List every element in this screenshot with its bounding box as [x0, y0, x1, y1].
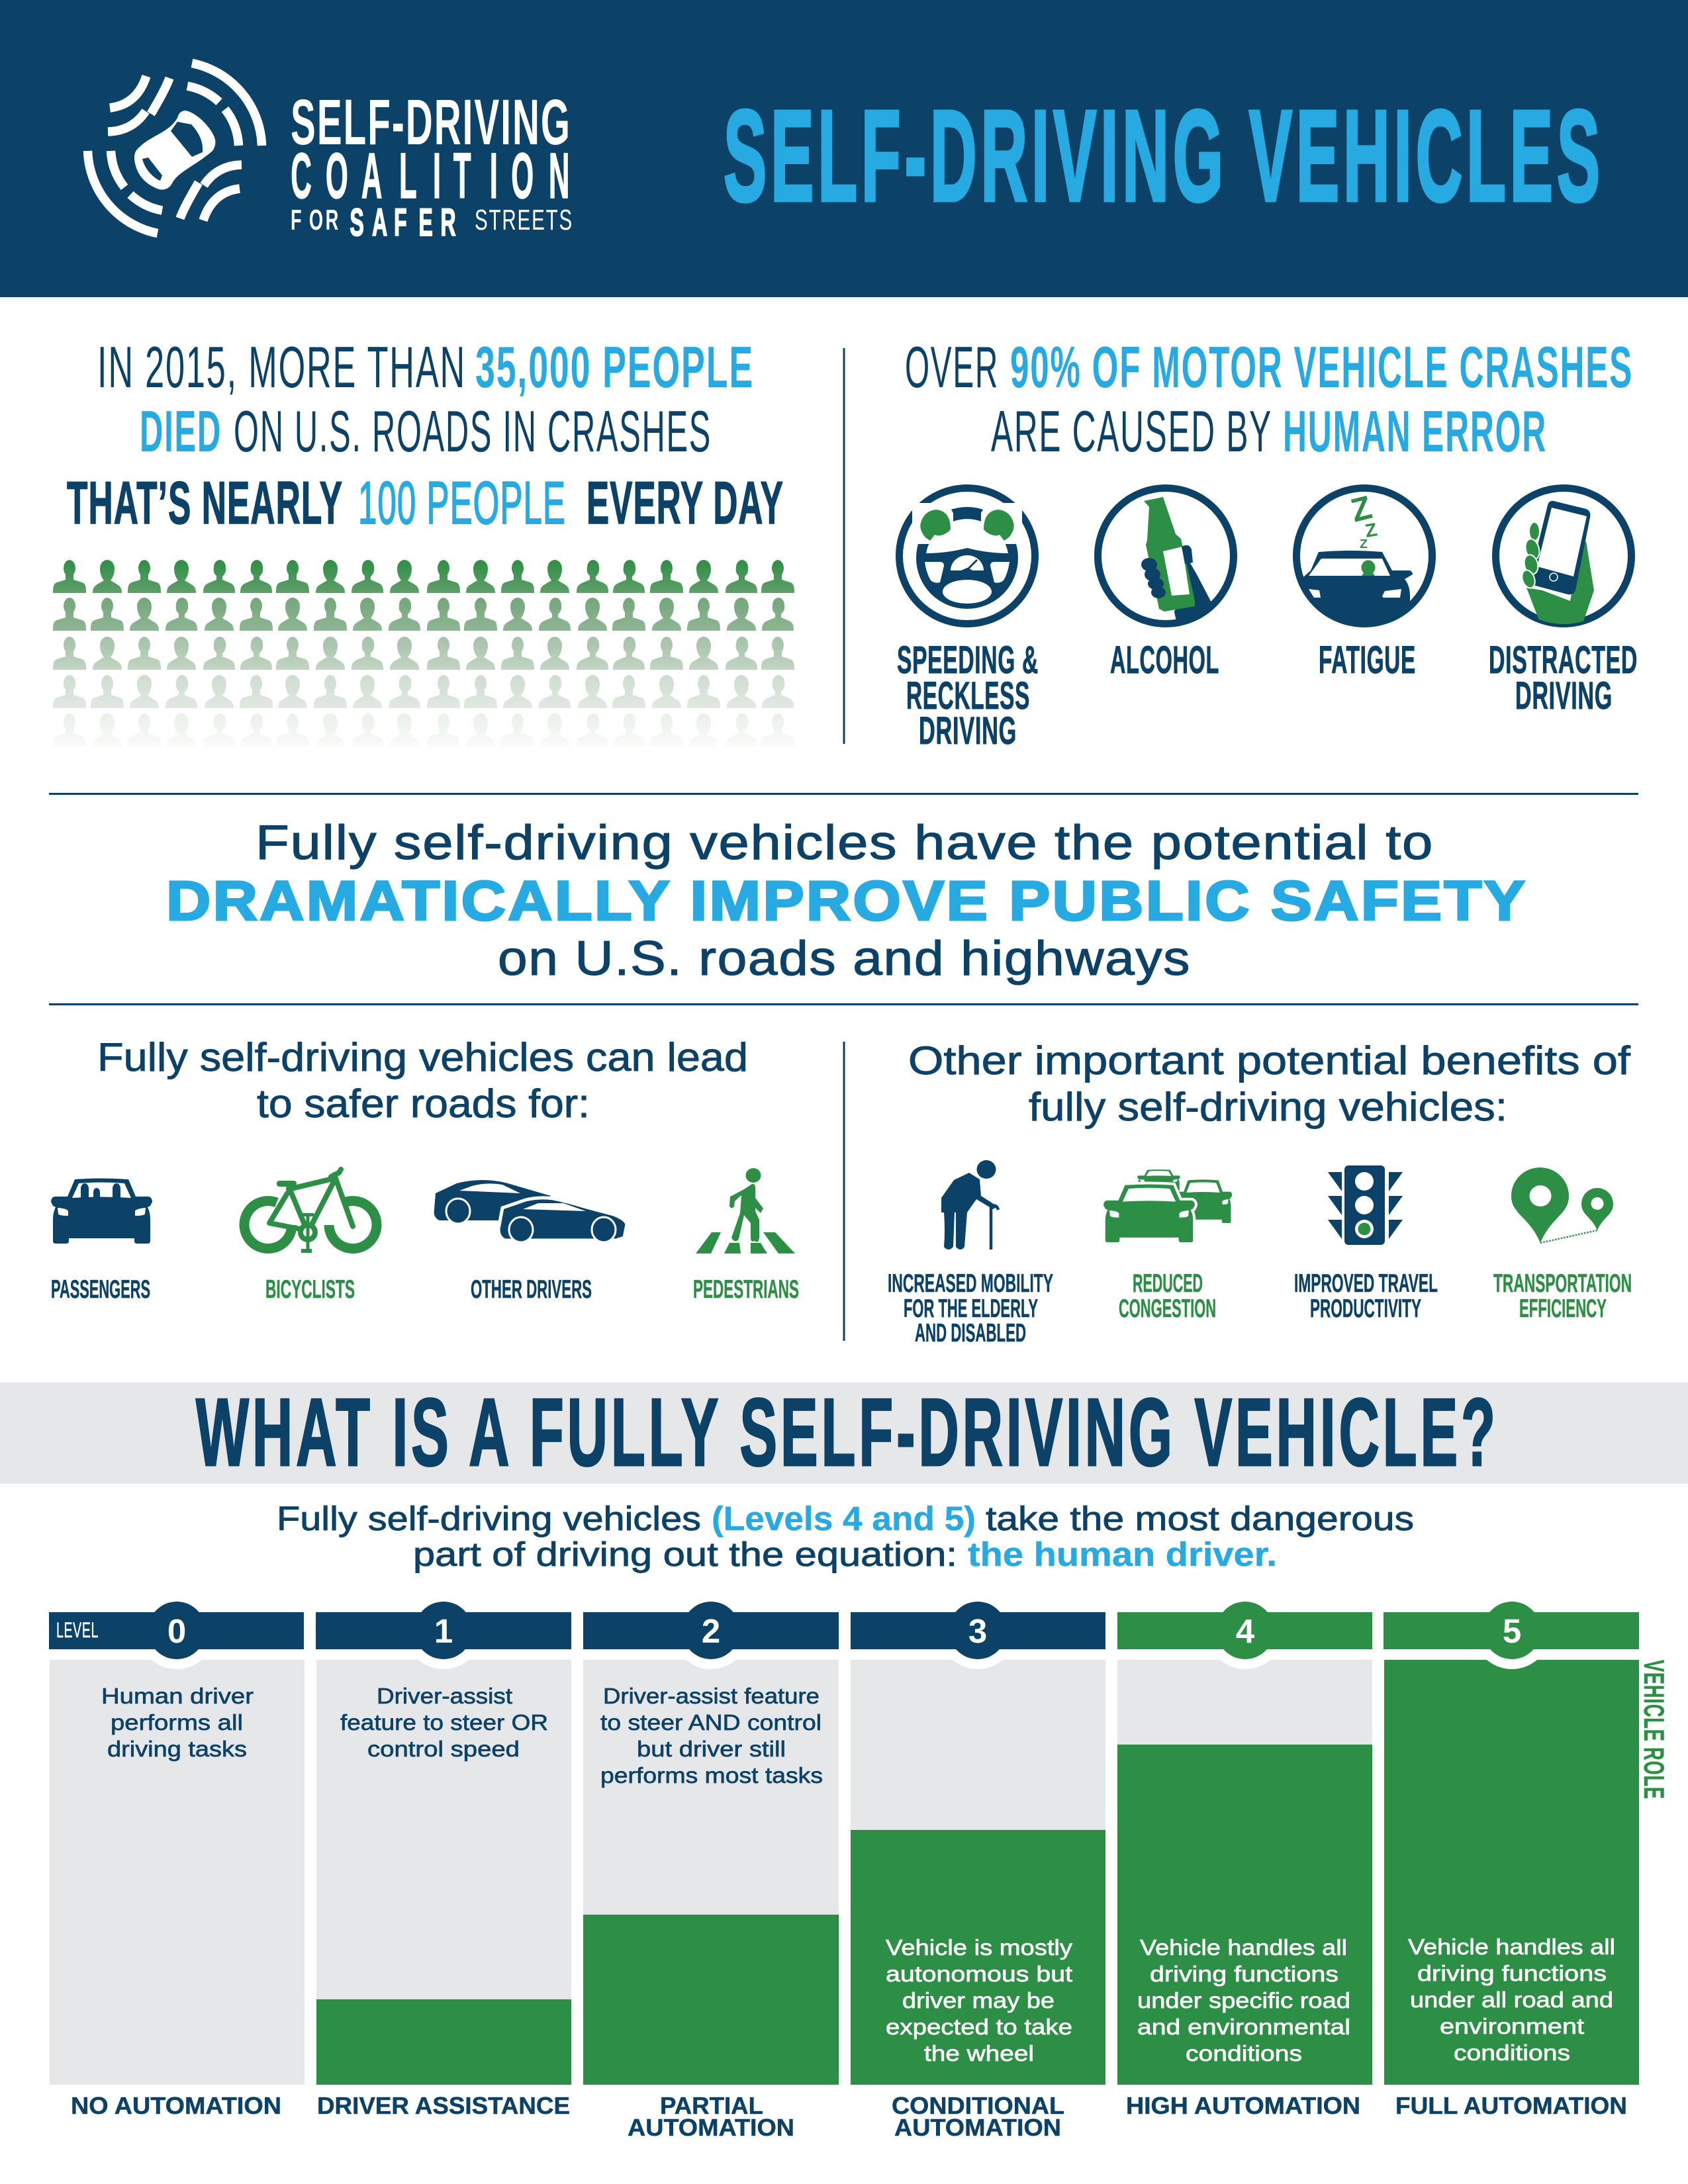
column: level 1: 1: [434, 1612, 453, 1650]
column: level 3: Vehicle is mostly: [886, 1935, 1073, 1960]
heading: over 90% human error: ARE CAUSED BY: [991, 398, 1272, 464]
label: passengers: PASSENGERS: [51, 1275, 150, 1304]
column: level 0: Human driver: [101, 1684, 254, 1708]
column: level 5: environment: [1440, 2014, 1584, 2038]
heading: 35,000 people died: DIED: [140, 398, 222, 464]
column: level 1: [316, 1591, 571, 2119]
column: level 0: 0: [167, 1612, 186, 1650]
heading: 35,000 people died: [97, 334, 754, 464]
panel: human error causes: [897, 334, 1638, 752]
intro text: Fully self-driving vehicles: [277, 1500, 701, 1537]
item: pedestrians: [693, 1168, 799, 1304]
column: level 2: Driver-assist feature: [603, 1684, 820, 1708]
label: speeding: DRIVING: [919, 709, 1017, 752]
column: level 4: under specific road: [1137, 1988, 1350, 2013]
icon: hand holding phone: [1496, 488, 1631, 625]
label: speeding: RECKLESS: [906, 674, 1030, 717]
label: alcohol: ALCOHOL: [1110, 639, 1219, 682]
chart: automation levels: [49, 1591, 1669, 2141]
subheading: nearly 100 people every day: EVERY DAY: [586, 470, 784, 537]
logo icon: car with sensor arcs: [87, 64, 262, 233]
column: level 2: but driver still: [637, 1737, 786, 1761]
callout: dramatically improve public safety: on U.S. roads and highways: [498, 932, 1191, 985]
column: level 5: driving functions: [1417, 1961, 1607, 1985]
cause: speeding and reckless driving: [897, 488, 1039, 752]
icon: sleeping driver in car: Z: [1347, 488, 1376, 529]
heading: over 90% human error: [905, 334, 1633, 464]
callout: dramatically improve public safety: DRAMATICALLY IMPROVE PUBLIC SAFETY: [166, 870, 1527, 932]
column: level 3: the wheel: [924, 2041, 1034, 2066]
column: level 5: Vehicle handles all: [1408, 1934, 1615, 1959]
icon: traffic light: [1328, 1165, 1403, 1245]
icon: elderly person with cane: [941, 1160, 998, 1250]
label: distracted driving: [1489, 639, 1638, 717]
subheading: nearly 100 people every day: THAT’S NEARLY: [67, 470, 343, 537]
heading: 35,000 people died: IN 2015, MORE THAN: [97, 334, 466, 400]
column: level 2: PARTIAL: [660, 2092, 763, 2119]
heading: safer roads for: [97, 1035, 748, 1126]
column: level 3: 3: [968, 1612, 987, 1650]
column: level 4: conditions: [1186, 2041, 1302, 2066]
axis label: vehicle role: VEHICLE ROLE: [1638, 1660, 1669, 1799]
heading: safer roads for: Fully self-driving vehicles can lead: [97, 1035, 748, 1079]
heading: 35,000 people died: ON U.S. ROADS IN CRASHES: [234, 398, 712, 464]
column: level 2: 2: [702, 1612, 720, 1650]
panel: crash deaths: [53, 334, 794, 747]
item: other drivers: [434, 1180, 627, 1304]
item: bicyclists: [244, 1169, 377, 1304]
icon: car with passengers: [51, 1178, 152, 1244]
column: level 0: driving tasks: [107, 1737, 247, 1761]
column: level 4: 4: [1236, 1612, 1255, 1650]
panel: other benefits: [888, 1038, 1632, 1347]
column: level 0: LEVEL: [56, 1618, 99, 1642]
item: improved travel productivity: [1294, 1165, 1438, 1323]
label: transportation efficiency: EFFICIENCY: [1519, 1295, 1607, 1323]
icon: congested cars: [1103, 1169, 1232, 1242]
callout: dramatically improve public safety: [166, 816, 1527, 985]
label: reduced congestion: [1119, 1269, 1216, 1323]
column: level 0: [49, 1591, 305, 2119]
cause: fatigue: [1296, 488, 1432, 682]
heading: safer roads for: to safer roads for:: [257, 1081, 590, 1126]
column: level 3: driver may be: [902, 1988, 1055, 2013]
column: level 4: driving functions: [1150, 1962, 1338, 1986]
label: transportation efficiency: [1493, 1269, 1632, 1323]
label: speeding: SPEEDING &: [897, 639, 1039, 682]
logo wordmark: COALITION: [291, 140, 569, 212]
label: increased mobility: FOR THE ELDERLY: [904, 1295, 1038, 1323]
subheading: nearly 100 people every day: [67, 470, 784, 537]
column: level 2: to steer AND control: [600, 1710, 821, 1735]
logo wordmark: STREETS: [475, 204, 573, 236]
label: improved travel productivity: [1294, 1269, 1438, 1323]
column: level 1: DRIVER ASSISTANCE: [317, 2092, 570, 2119]
panel: safer roads: [51, 1035, 799, 1304]
icon: bicycle: [244, 1169, 377, 1253]
icon: steering wheel: [899, 488, 1035, 623]
intro text: take the most dangerous: [986, 1500, 1414, 1537]
label: speeding: [897, 639, 1039, 752]
icon: sleeping driver in car: Z: [1364, 519, 1379, 541]
callout: dramatically improve public safety: Fully self-driving vehicles have the potential to: [256, 816, 1434, 870]
label: reduced congestion: REDUCED: [1133, 1269, 1203, 1298]
column: level 5: [1383, 1591, 1639, 2119]
column: level 3: AUTOMATION: [894, 2114, 1061, 2141]
item: increased mobility: [888, 1160, 1053, 1347]
label: increased mobility: [888, 1269, 1053, 1347]
column: level 4: Vehicle handles all: [1140, 1935, 1347, 1960]
heading: 35,000 people died: 35,000 PEOPLE: [475, 334, 754, 400]
pictogram: rows of people: [53, 560, 794, 747]
column: level 3: autonomous but: [886, 1962, 1072, 1986]
item: passengers: [51, 1178, 152, 1304]
logo: self-driving coalition: [87, 64, 573, 244]
icon: bottle in hand: [1098, 488, 1234, 635]
column: level 1: Driver-assist: [377, 1684, 512, 1708]
logo wordmark: SAFER: [350, 201, 456, 244]
logo wordmark: FOR: [291, 203, 338, 236]
label: fatigue: FATIGUE: [1319, 639, 1416, 682]
label: improved travel productivity: PRODUCTIVITY: [1310, 1295, 1421, 1323]
cause: alcohol: [1098, 488, 1234, 682]
column: level 0: NO AUTOMATION: [71, 2092, 281, 2119]
label: increased mobility: INCREASED MOBILITY: [888, 1269, 1053, 1298]
label: reduced congestion: CONGESTION: [1119, 1295, 1216, 1323]
label: improved travel productivity: IMPROVED TRAVEL: [1294, 1269, 1438, 1298]
column: level 2: AUTOMATION: [628, 2114, 794, 2141]
subheading: nearly 100 people every day: 100 PEOPLE: [358, 470, 566, 537]
label: increased mobility: AND DISABLED: [915, 1319, 1026, 1347]
heading: other benefits: Other important potential benefits of: [908, 1038, 1630, 1083]
intro text: the human driver.: [968, 1535, 1277, 1573]
intro text: [277, 1500, 1414, 1573]
column: level 3: CONDITIONAL: [892, 2092, 1064, 2119]
column: level 0: performs all: [111, 1710, 243, 1735]
column: level 3: expected to take: [886, 2015, 1072, 2039]
column: level 4: and environmental: [1137, 2015, 1350, 2039]
column: level 5: conditions: [1454, 2040, 1570, 2065]
icon: sleeping driver in car: [1296, 488, 1432, 635]
column: level 1: feature to steer OR: [340, 1710, 548, 1735]
label: distracted driving: DRIVING: [1515, 674, 1613, 717]
column: level 1: control speed: [367, 1737, 520, 1761]
column: level 5: 5: [1503, 1612, 1521, 1650]
label: other drivers: OTHER DRIVERS: [471, 1275, 592, 1304]
icon: sleeping driver in car: Z: [1360, 537, 1368, 551]
label: bicyclists: BICYCLISTS: [265, 1275, 355, 1304]
header banner: [0, 0, 1688, 297]
label: pedestrians: PEDESTRIANS: [693, 1275, 799, 1304]
column: level 5: under all road and: [1410, 1987, 1613, 2012]
column: level 2: performs most tasks: [600, 1763, 823, 1788]
column: level 4: [1117, 1591, 1372, 2119]
intro text: (Levels 4 and 5): [712, 1500, 976, 1537]
heading: over 90% human error: OVER: [905, 334, 999, 400]
column: level 3: [851, 1591, 1105, 2141]
heading: other benefits: fully self-driving vehicles:: [1029, 1085, 1507, 1129]
column: level 4: HIGH AUTOMATION: [1126, 2092, 1360, 2119]
icon: map pins: [1511, 1167, 1613, 1243]
column: level 2: [583, 1591, 839, 2141]
heading: other benefits: [908, 1038, 1630, 1129]
logo wordmark: [291, 86, 573, 244]
item: reduced congestion: [1103, 1169, 1232, 1323]
intro text: part of driving out the equation:: [413, 1535, 957, 1573]
cause: distracted driving: [1489, 488, 1638, 717]
column: level 5: FULL AUTOMATION: [1395, 2092, 1627, 2119]
logo wordmark: SELF-DRIVING: [291, 86, 571, 158]
icon: two cars: [434, 1180, 627, 1242]
icon: pedestrian on crosswalk: [696, 1168, 795, 1253]
item: transportation efficiency: [1493, 1167, 1632, 1323]
